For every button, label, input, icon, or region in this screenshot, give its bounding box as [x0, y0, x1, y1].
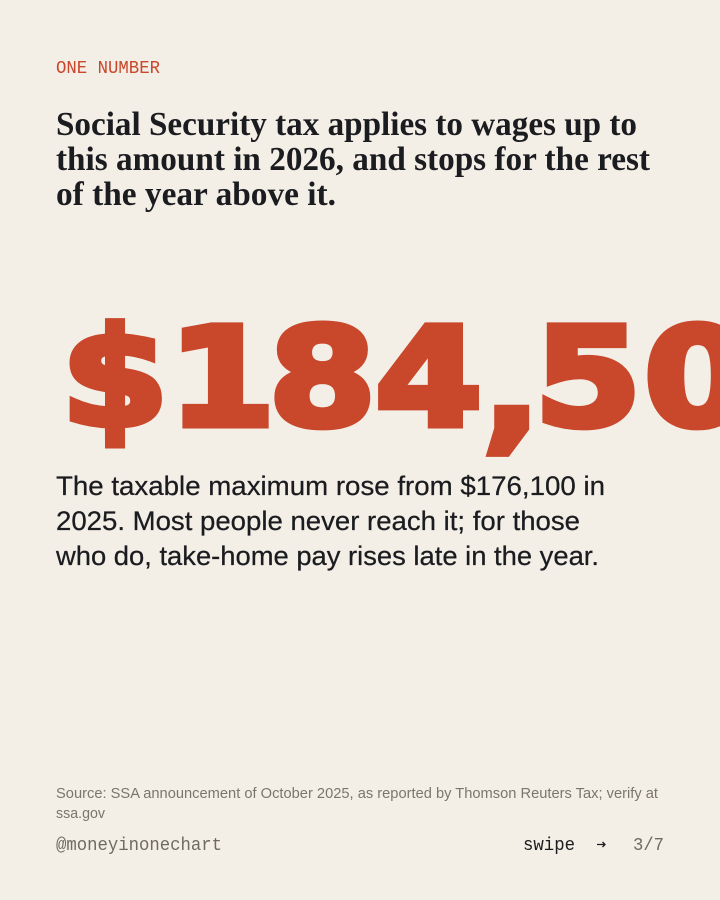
handle: @moneyinonechart: [56, 836, 222, 856]
source note: ssa.gov: [56, 806, 106, 822]
eyebrow label: ONE NUMBER: [56, 59, 160, 79]
headline: Social Security tax applies to wages up to: [56, 106, 637, 143]
headline: [56, 106, 651, 213]
page indicator: 3/7: [633, 836, 664, 856]
body text: The taxable maximum rose from $176,100 in: [56, 471, 605, 501]
body text: [55, 471, 605, 571]
headline: of the year above it.: [56, 176, 336, 213]
headline: this amount in 2026, and stops for the rest: [56, 141, 651, 178]
swipe label: swipe: [523, 836, 575, 856]
body text: 2025. Most people never reach it; for those: [56, 506, 580, 536]
source note: Source: SSA announcement of October 2025, as reported by Thomson Reuters Tax; verify at: [56, 786, 658, 802]
body text: who do, take-home pay rises late in the year.: [55, 541, 599, 571]
source note: [56, 786, 658, 822]
icon: arrow: [597, 842, 605, 847]
